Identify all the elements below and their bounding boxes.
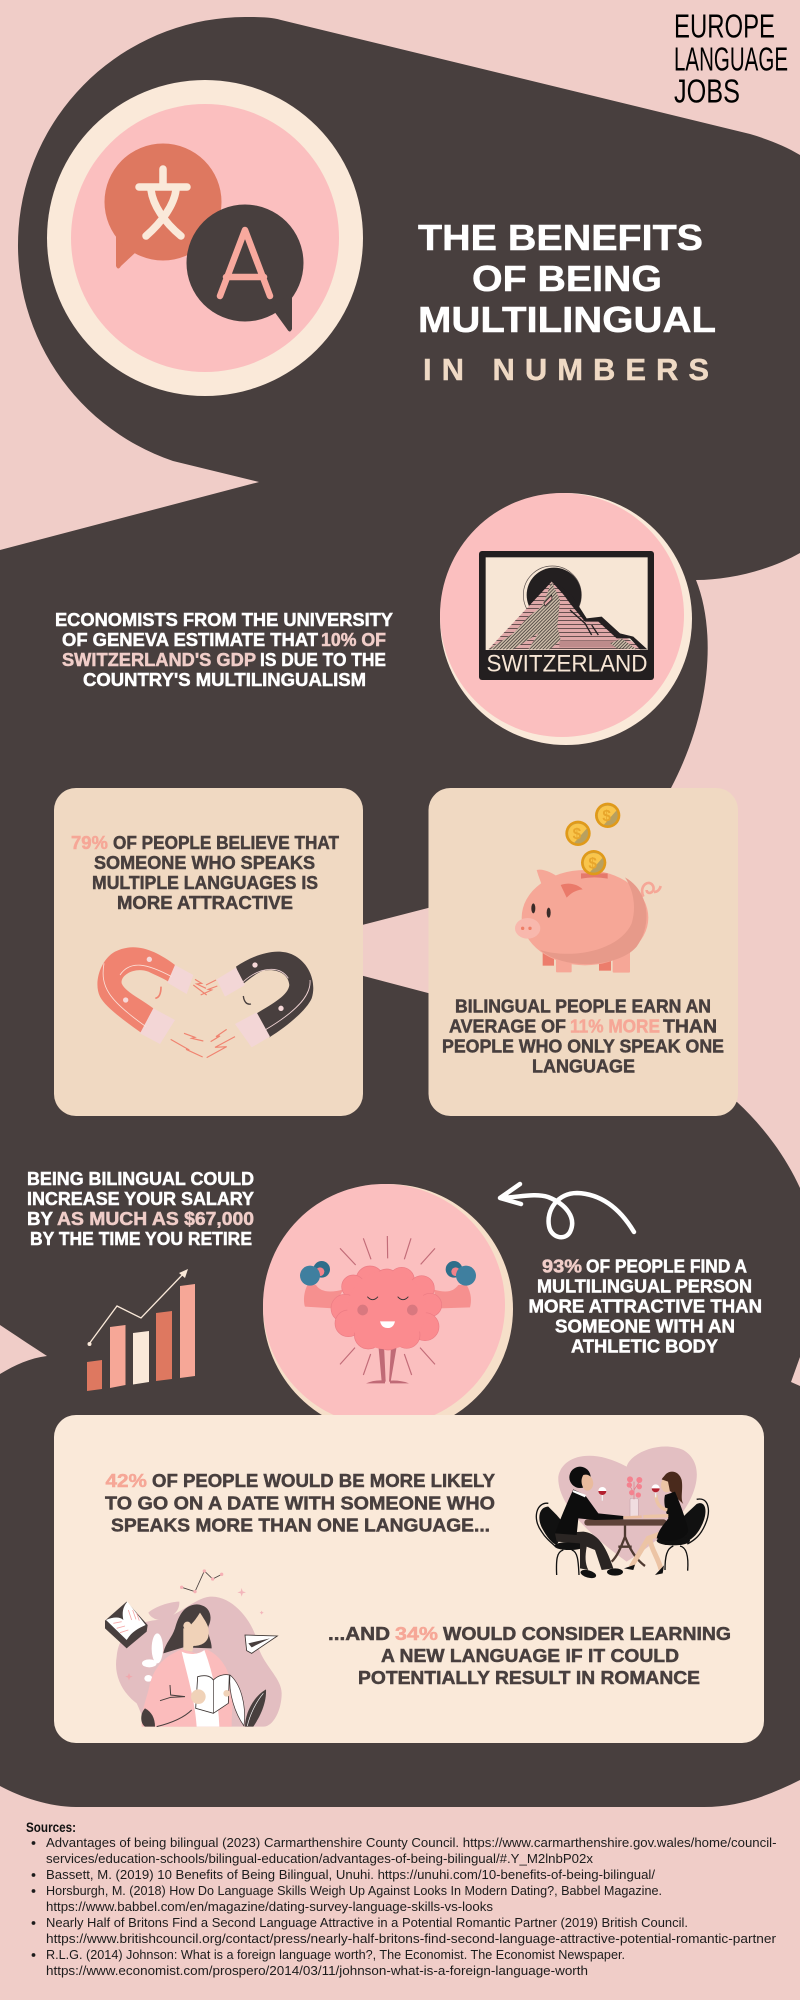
text: 93% fact: OF PEOPLE FIND A (586, 1256, 747, 1276)
text: 11% more fact: 11% MORE (570, 1016, 660, 1036)
arrow: curly white arrow (500, 1184, 634, 1237)
text: 34% fact: 34% (395, 1623, 438, 1644)
text: 93% fact: 93% (542, 1256, 582, 1276)
text: 34% fact: A NEW LANGUAGE IF IT COULD (381, 1645, 679, 1666)
illustration: man (555, 1467, 642, 1580)
text: 93% fact: SOMEONE WITH AN (555, 1316, 735, 1336)
sources list: https://www.economist.com/prospero/2014/03/11/johnson-what-is-a-foreign-language-worth (46, 1963, 588, 1978)
text: 42% fact: TO GO ON A DATE WITH SOMEONE WHO (105, 1492, 495, 1514)
text: 79% fact (71, 832, 340, 913)
logo: Europe Language Jobs (674, 8, 788, 110)
icon: Switzerland badge in circle (440, 493, 692, 745)
text: salary fact: BEING BILINGUAL COULD (27, 1168, 254, 1189)
text: 34% fact: POTENTIALLY RESULT IN ROMANCE (358, 1667, 700, 1688)
icon: zigzag and sparkles (125, 1569, 264, 1680)
text: salary fact: AS MUCH AS $67,000 (57, 1208, 254, 1229)
sources list: Advantages of being bilingual (2023) Carmarthenshire County Council. https://www.carmarthenshire.gov.wales/home/council- (46, 1835, 776, 1850)
text: 93% fact (528, 1256, 762, 1356)
panel: earnings card (428, 788, 738, 1116)
text: 34% fact: ...AND (328, 1623, 390, 1644)
icon: coins (565, 803, 620, 875)
text: 79% fact: MORE ATTRACTIVE (117, 892, 293, 913)
icon: coins: $ (573, 826, 582, 843)
icon: orange bubble with character (104, 144, 222, 268)
text: 42% fact: OF PEOPLE WOULD BE MORE LIKELY (152, 1470, 496, 1491)
illustration: couple on a date (536, 1447, 708, 1580)
sources list: https://www.babbel.com/en/magazine/dating-survey-language-skills-vs-looks (46, 1899, 493, 1914)
icon: floating book (105, 1602, 148, 1648)
text: 93% fact: MULTILINGUAL PERSON (537, 1276, 752, 1296)
text: 11% more fact: LANGUAGE (532, 1056, 635, 1076)
icon: brain figure (300, 1236, 476, 1383)
text: salary fact: BY THE TIME YOU RETIRE (30, 1228, 252, 1249)
text: Switzerland GDP fact: 10% OF (321, 629, 386, 650)
sources list (26, 1820, 777, 1978)
icon: coins: $ (602, 808, 611, 825)
chart: rising bars with arrow (87, 1269, 195, 1391)
text: 34% fact (328, 1623, 731, 1688)
text: 93% fact: MORE ATTRACTIVE THAN (528, 1296, 762, 1316)
text: 79% fact: OF PEOPLE BELIEVE THAT (113, 832, 340, 853)
sources list: Bassett, M. (2019) 10 Benefits of Being Bilingual, Unuhi. https://unuhi.com/10-benefits-of-being-bilingual/ (46, 1867, 655, 1882)
title: MULTILINGUAL (418, 299, 716, 340)
sources list: Nearly Half of Britons Find a Second Language Attractive in a Potential Romantic Partner (2019) British Council. (46, 1915, 688, 1930)
icon: translation speech bubbles (47, 80, 363, 396)
text: 93% fact: ATHLETIC BODY (571, 1336, 719, 1356)
illustration: woman (624, 1472, 688, 1575)
text: 79% fact: SOMEONE WHO SPEAKS (94, 852, 315, 873)
panel: romance card (54, 1415, 764, 1743)
text: 11% more fact: PEOPLE WHO ONLY SPEAK ONE (442, 1036, 724, 1056)
text: salary fact (27, 1168, 255, 1249)
icon: paper plane (245, 1635, 277, 1653)
text: 11% more fact: BILINGUAL PEOPLE EARN AN (455, 996, 711, 1016)
text: 34% fact: WOULD CONSIDER LEARNING (443, 1623, 731, 1644)
text: Switzerland GDP fact: SWITZERLAND'S GDP (62, 649, 256, 670)
text: salary fact: INCREASE YOUR SALARY (27, 1188, 255, 1209)
sources list: Horsburgh, M. (2018) How Do Language Skills Weigh Up Against Looks In Modern Dating?, Babbel Magazine. (46, 1883, 662, 1898)
text: 79% fact: 79% (71, 832, 108, 853)
text: salary fact: BY (27, 1208, 54, 1229)
sources list: services/education-schools/bilingual-education/advantages-of-being-bilingual/#.Y_M2lnbP02x (46, 1851, 594, 1866)
title: IN NUMBERS (423, 352, 709, 387)
text: Switzerland GDP fact: IS DUE TO THE (260, 649, 386, 670)
illustration: chairs (536, 1499, 708, 1575)
icon: piggy bank with coins (515, 803, 661, 973)
text: Switzerland GDP fact: COUNTRY'S MULTILINGUALISM (83, 669, 366, 690)
icon: Switzerland badge in circle: SWITZERLAND (486, 651, 648, 678)
logo: Europe Language Jobs: JOBS (674, 72, 740, 110)
text: 11% more fact (442, 996, 724, 1076)
sources list: Sources: (26, 1820, 76, 1835)
icon: Matterhorn badge (479, 551, 654, 680)
title (418, 217, 716, 387)
text: Switzerland GDP fact (55, 609, 394, 690)
panel: attractive card (54, 788, 363, 1116)
icon: heart of magnets (97, 947, 313, 1058)
text: 79% fact: MULTIPLE LANGUAGES IS (92, 872, 318, 893)
illustration: table (584, 1476, 667, 1566)
icon: coins: $ (588, 855, 597, 872)
icon: strong brain in circle (263, 1184, 513, 1434)
text: Switzerland GDP fact: ECONOMISTS FROM THE UNIVERSITY (55, 609, 394, 630)
icon: dark bubble with letter A (186, 204, 304, 332)
text: 42% fact (105, 1470, 496, 1536)
sources list: R.L.G. (2014) Johnson: What is a foreign language worth?, The Economist. The Economist Newspaper. (46, 1947, 625, 1962)
text: 42% fact: 42% (106, 1470, 147, 1491)
sources list: https://www.britishcouncil.org/contact/press/nearly-half-britons-find-second-language-attractive-potential-romantic-partner (46, 1931, 777, 1946)
text: Switzerland GDP fact: OF GENEVA ESTIMATE THAT (62, 629, 319, 650)
text: 11% more fact: AVERAGE OF (449, 1016, 566, 1036)
text: 11% more fact: THAN (663, 1016, 717, 1036)
text: 42% fact: SPEAKS MORE THAN ONE LANGUAGE... (111, 1514, 490, 1536)
title: OF BEING (472, 258, 662, 299)
title: THE BENEFITS (418, 217, 703, 258)
illustration: woman reading (105, 1569, 282, 1727)
